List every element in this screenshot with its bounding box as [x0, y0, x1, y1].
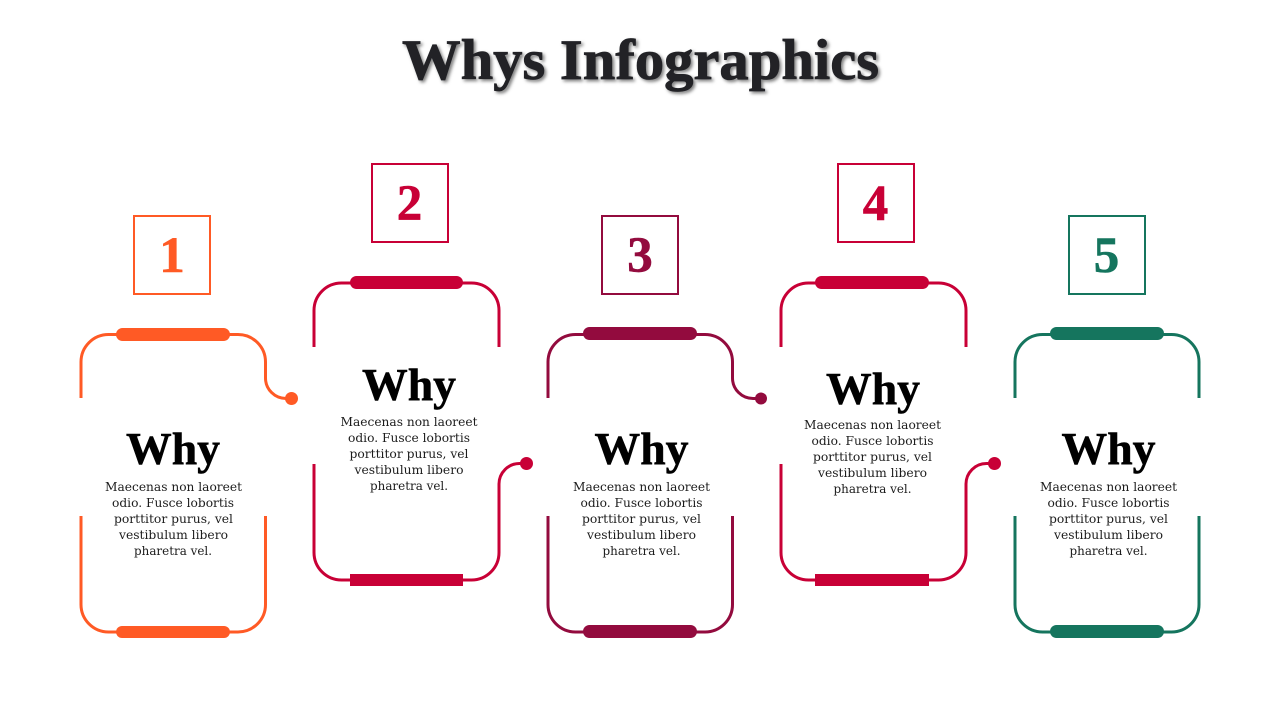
text block 4: porttitor purus, vel [813, 449, 932, 464]
panel: why 3 [548, 216, 767, 638]
number box 2 [372, 164, 448, 242]
heading 2: Why [362, 359, 456, 410]
text block 3 [573, 479, 710, 558]
text block 2: Maecenas non laoreet [340, 414, 478, 429]
text block 5 [1040, 479, 1177, 558]
text block 5: Maecenas non laoreet [1040, 479, 1177, 494]
number box 5 [1069, 216, 1145, 294]
number box 3: 3 [627, 228, 653, 284]
text block 2: pharetra vel. [370, 478, 448, 493]
panel: why 5 [1015, 216, 1199, 638]
text block 2: vestibulum libero [354, 462, 464, 477]
panel: why 2 [314, 164, 533, 586]
heading 3: Why [594, 423, 688, 474]
text block 1: porttitor purus, vel [114, 511, 233, 526]
text block 3: Maecenas non laoreet [573, 479, 710, 494]
text block 3: vestibulum libero [586, 527, 696, 542]
number box 5: 5 [1094, 228, 1119, 284]
frame 4 [781, 276, 1001, 586]
text block 3: pharetra vel. [602, 543, 680, 558]
heading 1: Why [126, 423, 220, 474]
number box 3 [602, 216, 678, 294]
text block 3: porttitor purus, vel [582, 511, 701, 526]
text block 4 [804, 417, 941, 496]
frame 1 [81, 328, 298, 638]
text block 1: Maecenas non laoreet [105, 479, 242, 494]
text block 2: odio. Fusce lobortis [348, 430, 470, 445]
text block 3: odio. Fusce lobortis [580, 495, 702, 510]
panel: why 1 [81, 216, 298, 638]
number box 2: 2 [397, 176, 422, 232]
text block 5: odio. Fusce lobortis [1048, 495, 1170, 510]
number box 1 [134, 216, 210, 294]
text block 5: pharetra vel. [1070, 543, 1148, 558]
text block 4: vestibulum libero [817, 465, 927, 480]
heading 4: Why [826, 363, 920, 414]
text block 4: pharetra vel. [834, 481, 912, 496]
text block 1: pharetra vel. [134, 543, 212, 558]
heading 5: Why [1062, 423, 1156, 474]
text block 4: Maecenas non laoreet [804, 417, 941, 432]
text block 2: porttitor purus, vel [350, 446, 468, 461]
frame 3 [548, 327, 767, 638]
text block 5: vestibulum libero [1053, 527, 1163, 542]
text block 2 [340, 414, 478, 493]
title: Whys Infographics [402, 29, 879, 92]
text block 1 [105, 479, 242, 558]
number box 4: 4 [863, 176, 888, 232]
panel: why 4 [781, 164, 1001, 586]
text block 1: vestibulum libero [118, 527, 228, 542]
text block 4: odio. Fusce lobortis [812, 433, 934, 448]
frame 2 [314, 276, 533, 586]
text block 1: odio. Fusce lobortis [112, 495, 234, 510]
frame 5 [1015, 327, 1199, 638]
text block 5: porttitor purus, vel [1049, 511, 1168, 526]
number box 1: 1 [159, 228, 185, 284]
number box 4 [838, 164, 914, 242]
